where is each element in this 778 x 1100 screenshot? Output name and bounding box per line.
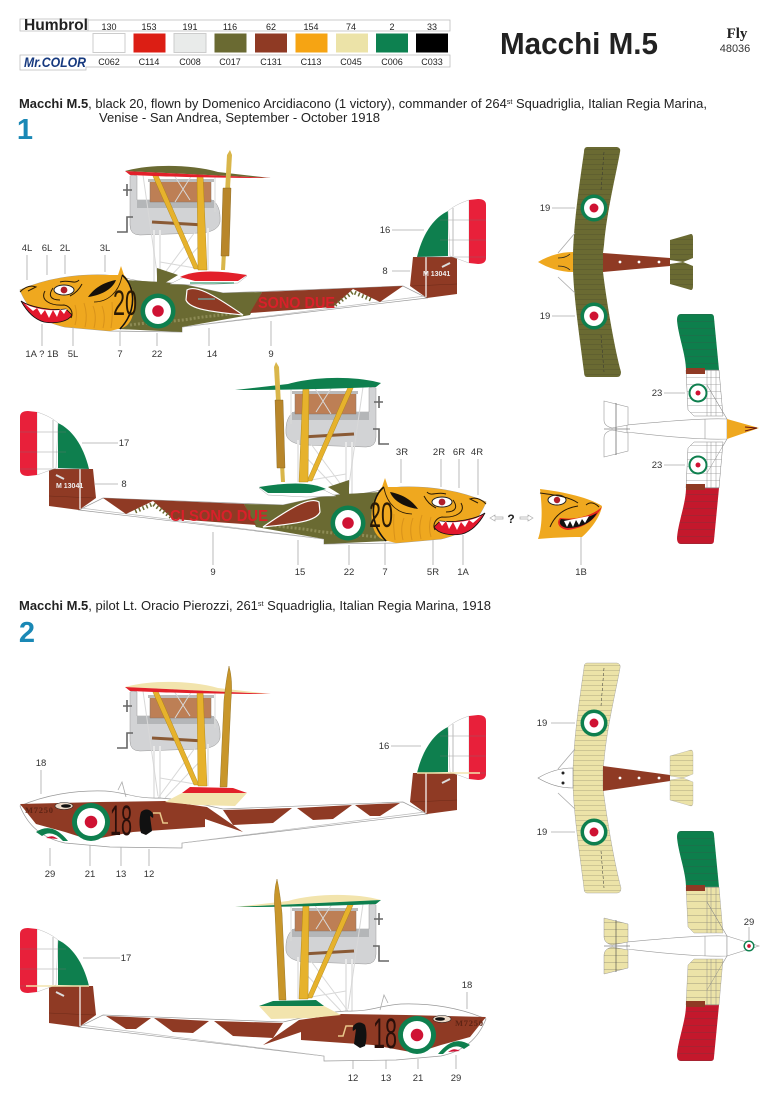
roundels [580, 194, 608, 330]
callouts: aircraft 1 top: 19 [540, 311, 550, 322]
callouts: aircraft 2 right: 12 [348, 1073, 358, 1084]
callouts: aircraft 2 right: 17 [121, 953, 131, 964]
caption: scheme 1: st [507, 99, 512, 106]
callouts: aircraft 1 right: 6R [453, 447, 465, 458]
callouts: aircraft 2 left: 21 [85, 869, 95, 880]
question mark with arrows [490, 512, 533, 526]
Fly logo and kit number: 48036 [720, 43, 750, 55]
callouts: aircraft 1 left: 16 [380, 225, 390, 236]
title: Macchi M.5 [500, 26, 658, 61]
Humbrol codes: 153 [141, 22, 157, 32]
Fly logo and kit number: Fly [727, 26, 748, 42]
callouts: aircraft 1 right: 3R [396, 447, 408, 458]
callouts: aircraft 2 left: 16 [379, 741, 389, 752]
callouts: aircraft 1 right: 15 [295, 567, 305, 578]
Mr.Color codes: C017 [219, 57, 241, 67]
serial: M7250 [455, 1018, 483, 1028]
serial: M 13041 [423, 271, 450, 278]
aircraft 2: left side profile [20, 666, 486, 848]
caption: scheme 1 [19, 97, 707, 125]
alternative nose 1B [538, 489, 602, 539]
hull slogan: SONO DUE [258, 295, 335, 312]
callouts: aircraft 1 right: 4R [471, 447, 483, 458]
number 20: 20 [113, 284, 137, 323]
callouts: aircraft 1 left: 8 [382, 266, 388, 277]
Humbrol heading: Humbrol [24, 17, 88, 34]
roundels [580, 710, 608, 846]
paint colour table [20, 17, 450, 70]
hull fairing [186, 288, 243, 315]
callouts: aircraft 1 left: 5L [68, 349, 78, 360]
Humbrol codes: 191 [182, 22, 198, 32]
callouts: aircraft 2 right: 29 [451, 1073, 461, 1084]
callouts: aircraft 1 right: 1B [575, 567, 587, 578]
Humbrol codes: 33 [427, 22, 437, 32]
callouts: aircraft 1 right: 17 [119, 438, 129, 449]
eagle emblem [140, 810, 153, 835]
question mark with arrows: ? [507, 512, 515, 526]
callouts: aircraft 1 right: 7 [382, 567, 388, 578]
callout: aircraft 2 under: 29 [744, 917, 754, 928]
callouts: aircraft 2 left [36, 741, 421, 880]
callouts: aircraft 1 left: 22 [152, 349, 162, 360]
callouts: aircraft 1 left [22, 225, 424, 360]
Mr.Color heading: Mr.COLOR [24, 54, 87, 70]
callouts: aircraft 1 right [82, 438, 587, 578]
caption: scheme 2: Macchi M.5, pilot Lt. Oracio Pierozzi, 261 [19, 599, 252, 613]
Humbrol codes: 74 [346, 22, 356, 32]
Mr.Color codes: C113 [301, 57, 321, 67]
callouts: aircraft 1 right: 8 [121, 479, 127, 490]
aircraft 1: left side profile [20, 150, 486, 332]
callouts: aircraft 1 left: 6L [42, 243, 52, 254]
caption: scheme 2: Squadriglia, Italian Regia Marina, 1918 [264, 599, 491, 613]
number 20: 20 [369, 496, 393, 535]
Humbrol codes: 116 [223, 22, 237, 32]
Humbrol codes: 154 [303, 22, 319, 32]
callouts: aircraft 2 right: 13 [381, 1073, 391, 1084]
roundels [688, 384, 708, 474]
callouts: aircraft 2 left: 13 [116, 869, 126, 880]
Humbrol codes [101, 22, 437, 32]
callouts: aircraft 1 left: 7 [117, 349, 123, 360]
caption: scheme 1: Macchi M.5, black 20, flown by Domenico Arcidiacono (1 victory), commander of 264 [19, 97, 492, 111]
Humbrol codes: 2 [389, 22, 395, 32]
callouts: aircraft 2 right: 21 [413, 1073, 423, 1084]
callouts: aircraft 2 top: 19 [537, 718, 547, 729]
callouts: aircraft 2 left: 12 [144, 869, 154, 880]
callouts: aircraft 1 right: 5R [427, 567, 439, 578]
callouts: aircraft 2 left: 18 [36, 758, 46, 769]
top view: aircraft 1 [538, 147, 693, 377]
callouts: aircraft 1 under: 23 [652, 460, 662, 471]
aircraft 1: right side profile [20, 362, 486, 544]
callouts: aircraft 2 top [537, 718, 575, 838]
aircraft 2: right side profile [20, 879, 486, 1061]
Mr.Color codes: C033 [421, 57, 443, 67]
serial: M7250 [25, 805, 53, 815]
callouts: aircraft 2 left: 29 [45, 869, 55, 880]
callouts: aircraft 1 under [652, 388, 685, 471]
Humbrol codes: 130 [101, 22, 117, 32]
callouts: aircraft 1 right: 9 [210, 567, 216, 578]
serial: M 13041 [56, 483, 83, 490]
scheme number 2: 2 [19, 617, 35, 649]
roundel [140, 294, 176, 328]
Mr.Color codes: C131 [260, 57, 282, 67]
callouts: aircraft 1 left: 4L [22, 243, 32, 254]
colour swatches [93, 34, 448, 52]
callouts: aircraft 1 left: 14 [207, 349, 217, 360]
Mr.Color codes: C045 [340, 57, 362, 67]
upper wing [125, 166, 271, 178]
callouts: aircraft 1 left: 9 [268, 349, 274, 360]
aircraft 2: left side profile: 18 [110, 797, 132, 845]
hull slogan: CI SONO DUE [170, 508, 268, 525]
Mr.Color codes: C008 [179, 57, 201, 67]
caption: scheme 1: Venise - San Andrea, September - October 1918 [99, 111, 380, 125]
roundel [398, 1016, 436, 1054]
callouts: aircraft 1 right: 2R [433, 447, 445, 458]
scheme number 1: 1 [17, 114, 33, 146]
nose roundel [744, 940, 754, 952]
callouts: aircraft 2 right: 18 [462, 980, 472, 991]
callouts: aircraft 2 right [83, 953, 472, 1084]
callouts: aircraft 1 left: 1A ? 1B [25, 349, 59, 360]
callouts: aircraft 1 left: 2L [60, 243, 70, 254]
number 18: 18 [373, 1010, 397, 1058]
callouts: aircraft 1 under: 23 [652, 388, 662, 399]
callouts: aircraft 1 left: 3L [100, 243, 110, 254]
callouts: aircraft 1 top [540, 203, 575, 322]
roundel [72, 803, 110, 841]
Fly logo and kit number [720, 26, 750, 55]
callout: aircraft 2 under [744, 917, 754, 940]
Humbrol codes: 62 [266, 22, 276, 32]
caption: scheme 1: Squadriglia, Italian Regia Marina, [512, 97, 707, 111]
under view: aircraft 1 [604, 314, 759, 544]
callouts: aircraft 1 right: 1A [457, 567, 469, 578]
under view: aircraft 2 [604, 831, 759, 1061]
callouts: aircraft 2 top: 19 [537, 827, 547, 838]
Mr.Color codes: C062 [98, 57, 120, 67]
Mr.Color codes [98, 57, 443, 67]
callouts: aircraft 1 right: 22 [344, 567, 354, 578]
callouts: aircraft 1 top: 19 [540, 203, 550, 214]
top view: aircraft 2 [538, 663, 693, 893]
Mr.Color codes: C114 [139, 57, 159, 67]
caption: scheme 2: st [258, 601, 264, 608]
Mr.Color codes: C006 [381, 57, 403, 67]
lower wing [170, 271, 247, 285]
